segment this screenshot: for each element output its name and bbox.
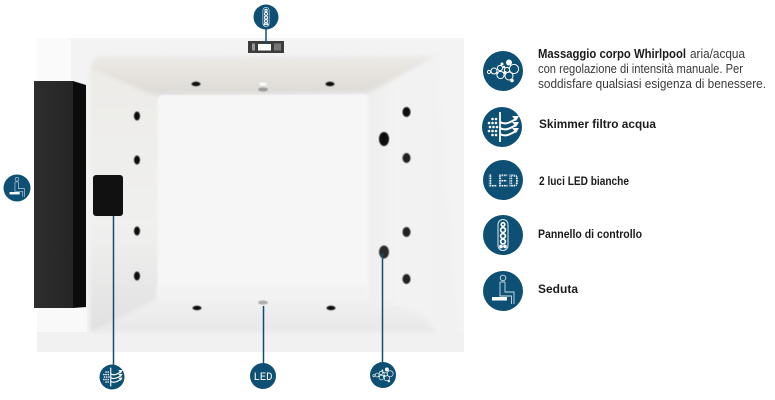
callout icon: skimmer [100, 364, 124, 390]
text: seat: Seduta [538, 282, 578, 296]
icon: seat [483, 271, 523, 311]
callout icon: whirlpool [370, 362, 396, 388]
text: whirlpool description: Massaggio corpo Whirlpool [538, 47, 686, 61]
legend: skimmer [482, 107, 656, 147]
LED lights [258, 82, 268, 304]
legend: seat [483, 271, 578, 311]
icon: LED: LED [487, 171, 519, 193]
text: whirlpool description: soddisfare qualsiasi esigenza di benessere. [538, 77, 766, 91]
water jets [134, 82, 410, 310]
control panel [248, 41, 284, 53]
legend: control panel [483, 215, 642, 255]
text: LED: 2 luci LED bianche [539, 174, 629, 188]
headrest cushion [93, 175, 123, 216]
legend: LED [483, 160, 629, 200]
leader lines [114, 28, 382, 366]
text: whirlpool description: aria/acqua [690, 47, 745, 61]
callout icon: seat [4, 174, 30, 202]
icon: whirlpool bubbles [483, 51, 523, 91]
callout icon: LED [250, 363, 276, 389]
text: control panel: Pannello di controllo [538, 227, 642, 241]
icon: LED [483, 160, 523, 200]
bathtub top view [37, 38, 464, 352]
text: whirlpool description: con regolazione di intensità manuale. Per [538, 62, 743, 76]
callout icon: LED: LED [254, 372, 273, 384]
black side panel [34, 81, 86, 308]
text: skimmer: Skimmer filtro acqua [539, 117, 656, 131]
icon: control panel [483, 215, 523, 255]
icon: skimmer filter [482, 107, 522, 147]
legend: whirlpool [483, 47, 766, 91]
callout icon: control panel [254, 4, 278, 30]
